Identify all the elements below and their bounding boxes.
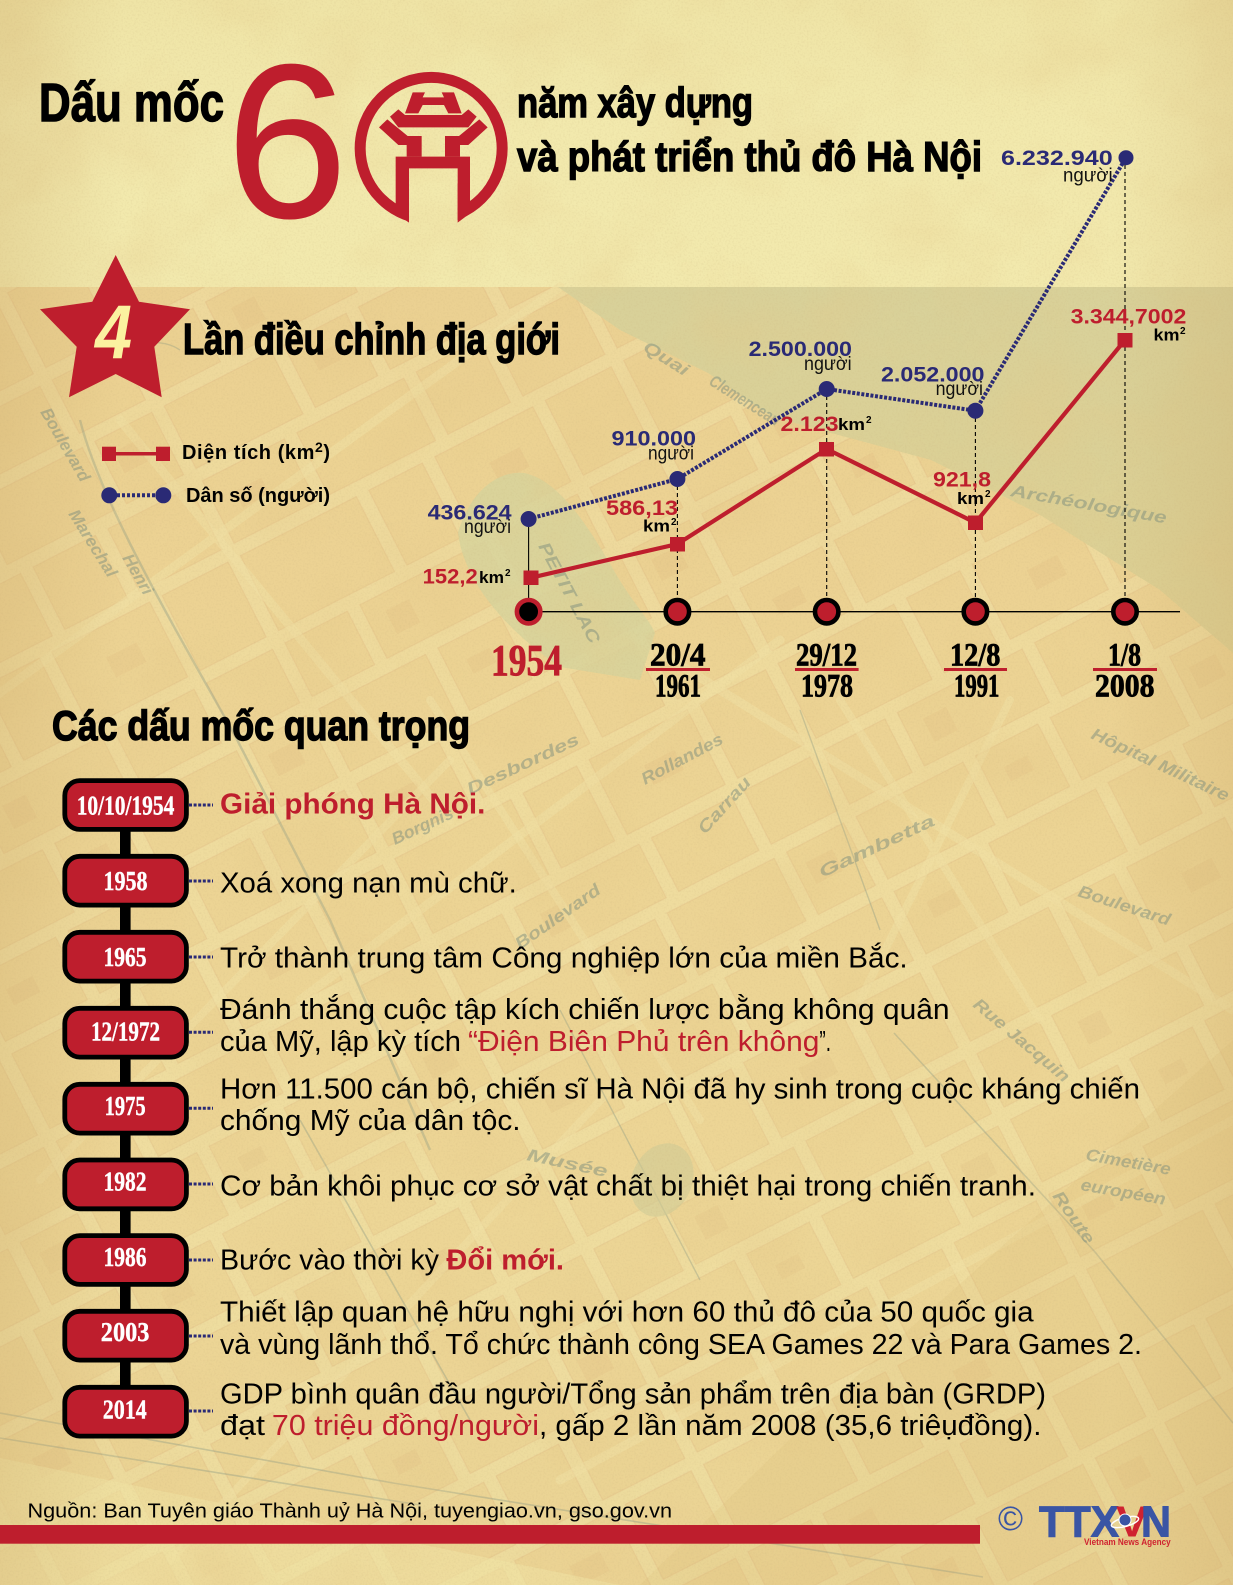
data labels: 2.123	[780, 413, 838, 436]
TTXVN logo: N	[1141, 1498, 1171, 1547]
heading: Các dấu mốc quan trọng: Các dấu mốc quan trọng	[52, 702, 470, 749]
milestone 1986: Đổi mới.	[446, 1244, 564, 1276]
milestone 10/10/1954: 10/10/1954	[77, 790, 174, 820]
date labels: 2008	[1095, 669, 1154, 705]
data labels: 2.052.000	[881, 364, 984, 387]
population dots	[521, 150, 1134, 527]
legend: area: Diện tích (km	[182, 442, 314, 464]
milestone 2014	[65, 1378, 1046, 1442]
date labels: 29/12	[796, 638, 857, 674]
milestone 1982: 1982	[104, 1167, 146, 1197]
legend: area: 2	[315, 439, 323, 455]
data labels: 921,8	[933, 469, 991, 492]
milestone 2003: 2003	[101, 1317, 149, 1347]
star badge with number 4	[40, 255, 190, 397]
milestone 2014: đạt	[220, 1410, 265, 1442]
TTXVN logo: TTX	[1039, 1498, 1119, 1547]
timeline nodes	[517, 600, 1137, 623]
map street labels: Archéologique	[1008, 481, 1168, 527]
milestone 1975	[65, 1073, 1140, 1137]
date labels: 1991	[954, 669, 999, 705]
data labels: 2.500.000	[749, 338, 852, 361]
milestone 2003: và vùng lãnh thổ. Tổ chức thành công SEA Games 22 và Para Games 2.	[220, 1329, 1142, 1361]
map street labels: Cimetière	[1084, 1145, 1172, 1179]
axis	[528, 611, 1180, 613]
milestone 12/1972: của Mỹ, lập kỳ tích	[220, 1026, 461, 1058]
data labels: km	[643, 517, 670, 536]
data labels: 910.000	[612, 428, 696, 451]
map street labels: Rollandes	[638, 730, 726, 789]
dotted leader lines	[189, 805, 213, 1411]
data labels: 6.232.940	[1001, 147, 1113, 170]
heading: Lần điều chỉnh địa giới: Lần điều chỉnh địa giới	[183, 315, 560, 364]
TTXVN logo	[998, 1498, 1171, 1548]
milestones timeline	[65, 781, 1142, 1442]
milestone 1965: 1965	[104, 942, 146, 972]
connector spine	[120, 805, 131, 1405]
legend: area: )	[323, 442, 330, 464]
milestone 1958	[65, 856, 517, 905]
date labels	[491, 636, 1157, 705]
milestone 1986	[65, 1236, 564, 1284]
date labels: 1978	[801, 669, 853, 705]
milestone 1975: chống Mỹ của dân tộc.	[220, 1105, 521, 1137]
title	[39, 20, 982, 264]
milestone 1958: 1958	[104, 866, 148, 896]
vertical guides	[529, 158, 1125, 611]
data labels: 152,2	[423, 565, 478, 588]
title: năm xây dựng: năm xây dựng	[517, 79, 753, 126]
data labels: 3.344,7002	[1071, 305, 1186, 328]
legend: population: Dân số (người)	[186, 485, 330, 507]
data labels: km	[957, 489, 984, 508]
big number 6: 6	[226, 20, 348, 264]
area squares	[524, 333, 1132, 585]
date labels: 20/4	[650, 638, 706, 674]
data labels: 2	[985, 489, 991, 500]
map street labels: PETIT LAC	[534, 539, 604, 648]
title: Dấu mốc: Dấu mốc	[39, 73, 224, 133]
milestone 2014: , gấp 2 lần năm 2008 (35,6 triêụđồng).	[539, 1410, 1041, 1442]
date labels: 1/8	[1108, 638, 1141, 674]
data labels: km	[1154, 326, 1180, 345]
milestone 12/1972: Đánh thắng cuộc tập kích chiến lược bằng không quân	[220, 993, 950, 1026]
milestone 10/10/1954: Giải phóng Hà Nội.	[220, 788, 485, 820]
map street labels	[37, 337, 1232, 1247]
area line	[531, 340, 1125, 578]
source note: Nguồn: Ban Tuyên giáo Thành uỷ Hà Nội, tuyengiao.vn, gso.gov.vn	[28, 1500, 672, 1522]
map street labels: européen	[1079, 1175, 1167, 1209]
map street labels: Borgnis	[389, 804, 457, 849]
title: và phát triển thủ đô Hà Nội: và phát triển thủ đô Hà Nội	[517, 133, 982, 180]
data labels: người	[936, 379, 983, 400]
legend	[101, 439, 330, 507]
milestone 1986: Bước vào thời kỳ	[220, 1244, 439, 1276]
milestone 1982: Cơ bản khôi phục cơ sở vật chất bị thiệt hại trong chiến tranh.	[220, 1170, 1036, 1202]
pond	[619, 1133, 705, 1227]
map street labels: Boulevard	[1076, 882, 1174, 930]
TTXVN logo: Vietnam News Agency	[1084, 1537, 1171, 1548]
icon: Hanoi gate logo (the zero of 60)	[360, 77, 502, 223]
data labels: 586,13	[606, 497, 678, 520]
map street labels: Marechal	[65, 506, 122, 582]
TTXVN logo: V	[1116, 1498, 1149, 1547]
data labels: km	[479, 568, 504, 587]
milestone 1982	[65, 1160, 1036, 1209]
milestone 12/1972: ”.	[819, 1026, 831, 1058]
green river area	[558, 287, 1233, 653]
data labels: 2	[505, 568, 511, 579]
legend: area	[102, 439, 330, 464]
milestone 2014: 70 triệu đồng/người	[272, 1410, 539, 1442]
milestone 2003: Thiết lập quan hệ hữu nghị với hơn 60 thủ đô của 50 quốc gia	[220, 1297, 1034, 1329]
date labels: 1961	[655, 669, 701, 705]
date labels: 1954	[491, 636, 562, 685]
milestone 2014: GDP bình quân đầu người/Tổng sản phẩm trên địa bàn (GRDP)	[220, 1378, 1046, 1410]
data labels: 436.624	[428, 502, 512, 524]
map street labels: Musée	[525, 1145, 609, 1181]
data labels: người	[804, 354, 852, 375]
milestone 1965: Trở thành trung tâm Công nghiệp lớn của miền Bắc.	[220, 942, 908, 975]
milestone 2003	[65, 1297, 1142, 1361]
milestone 1975: Hơn 11.500 cán bộ, chiến sĩ Hà Nội đã hy sinh trong cuộc kháng chiến	[220, 1073, 1140, 1105]
data labels: 2	[1180, 326, 1186, 337]
data labels: người	[464, 517, 511, 538]
milestone 12/1972	[65, 993, 950, 1058]
map street labels: Desbordes	[464, 730, 582, 799]
lake	[458, 473, 655, 680]
legend: population	[101, 485, 330, 507]
milestone 1958: Xoá xong nạn mù chữ.	[220, 868, 517, 900]
milestone 1986: 1986	[104, 1242, 146, 1272]
date labels: 12/8	[950, 638, 1000, 674]
population dotted line	[529, 158, 1126, 519]
milestone 12/1972: 12/1972	[91, 1017, 160, 1047]
star badge with number 4: 4	[93, 290, 132, 375]
milestone 12/1972: “Điện Biên Phủ trên không	[468, 1026, 819, 1058]
map street labels: Henri	[119, 550, 158, 599]
map street labels: Gambetta	[816, 811, 938, 882]
data labels: 2	[671, 517, 677, 528]
map street labels: Hôpital Militaire	[1088, 724, 1232, 805]
data labels	[423, 147, 1186, 588]
map street labels: Rue Jacquin	[969, 995, 1074, 1086]
milestone 1965	[65, 932, 908, 981]
map street labels: Boulevard	[37, 404, 94, 486]
map street labels: Quai	[640, 337, 694, 381]
footer bar	[0, 1525, 980, 1544]
data labels: người	[1063, 166, 1113, 187]
data labels: 2	[866, 415, 872, 426]
TTXVN logo: ©	[998, 1500, 1023, 1538]
milestone 2014: 2014	[103, 1394, 147, 1424]
lighter paper fold	[0, 1458, 620, 1585]
data labels: người	[648, 443, 694, 464]
map street labels: Boulevard	[511, 880, 605, 953]
line chart: area and population 1954-2008	[423, 147, 1186, 705]
map street labels: Route	[1049, 1187, 1099, 1247]
milestone 1975: 1975	[105, 1091, 146, 1121]
data labels: km	[838, 415, 865, 434]
map street labels: Clemenceau	[706, 371, 784, 430]
milestone 10/10/1954	[65, 781, 485, 829]
map street labels: Carrau	[694, 772, 755, 838]
